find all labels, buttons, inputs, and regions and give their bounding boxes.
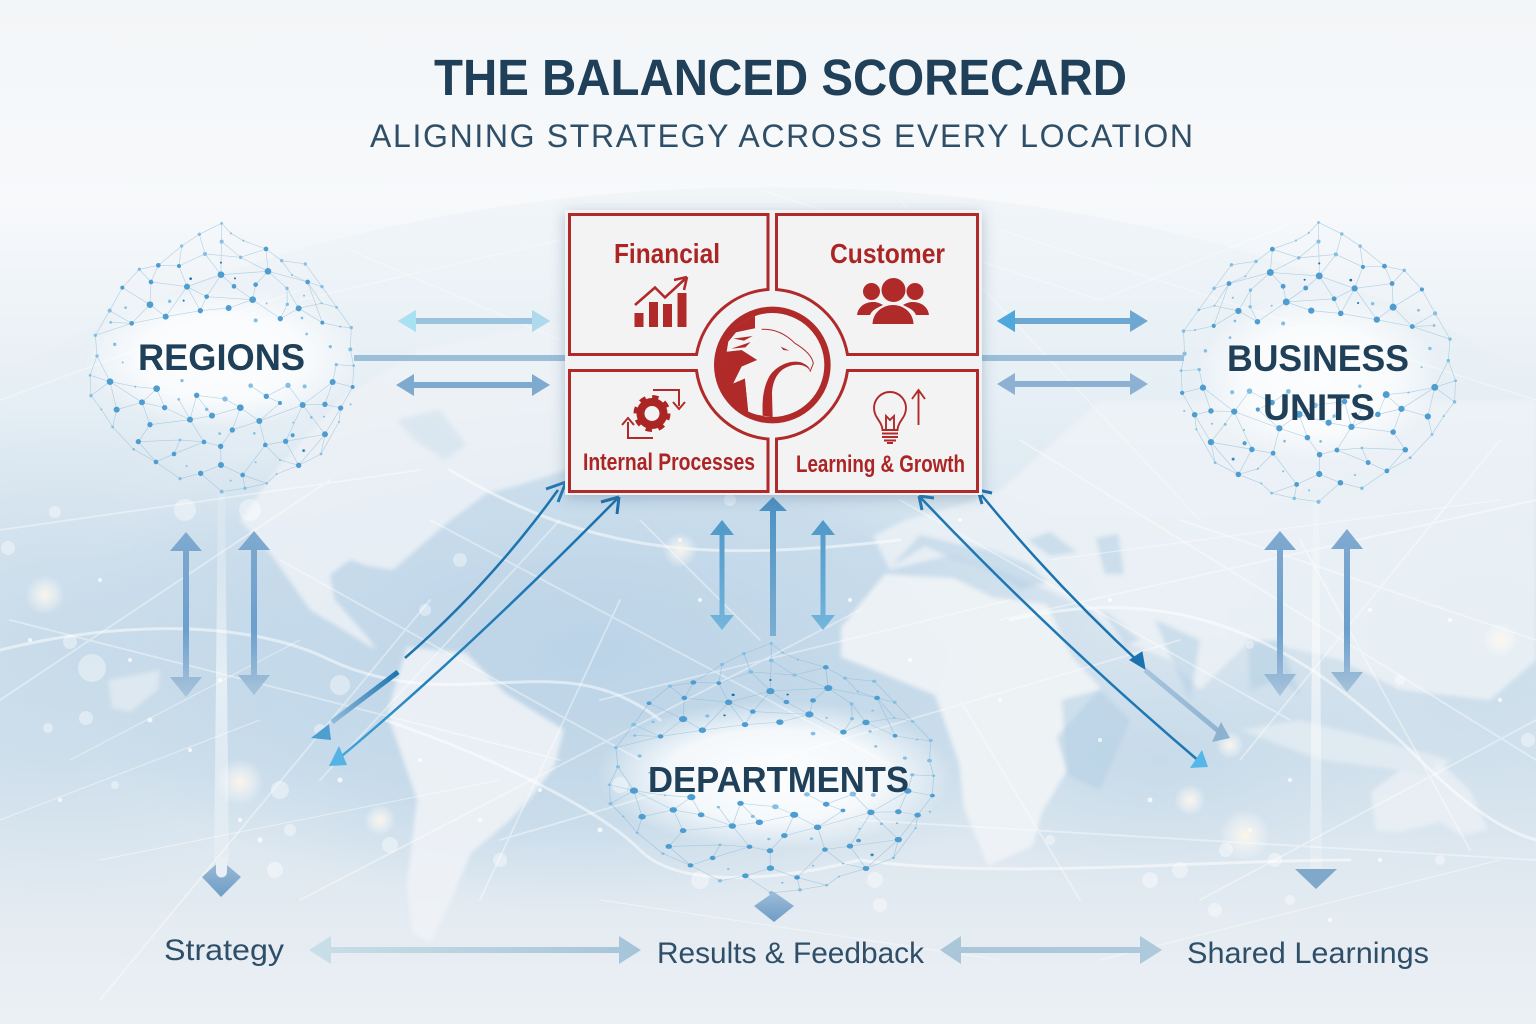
arrow: departments down	[754, 892, 794, 922]
network: departments	[595, 642, 955, 895]
icon: light bulb with up arrow	[874, 390, 925, 443]
logo: eagle in circle	[714, 307, 831, 423]
panel: internal processes: Internal Processes	[583, 449, 755, 476]
arrows: business units vertical	[1264, 529, 1363, 696]
arrows: regions to scorecard	[354, 310, 566, 396]
panel: financial: Financial	[614, 238, 720, 269]
arrow: strategy to results	[309, 936, 641, 964]
panel: financial	[570, 214, 768, 354]
arrows: business units to scorecard	[982, 310, 1184, 395]
label: business units: BUSINESS	[1227, 338, 1409, 379]
network: business units	[1180, 221, 1457, 504]
arrow: results to learnings	[940, 936, 1162, 964]
panel: balanced scorecard card	[565, 210, 982, 495]
background: world map	[0, 320, 1536, 943]
panel: learning and growth	[776, 370, 978, 492]
background: sparkles	[1, 494, 1535, 922]
background: light rays and connection lines	[0, 190, 1536, 1000]
panel: internal processes	[570, 370, 768, 492]
label: regions: REGIONS	[138, 337, 305, 378]
arrows: centre vertical	[710, 497, 835, 636]
network: regions	[82, 222, 362, 494]
curved arrows: right	[919, 490, 1230, 768]
icon: bar chart with rising arrow	[634, 277, 687, 327]
icon: three people	[857, 278, 929, 324]
label: shared learnings: Shared Learnings	[1187, 937, 1429, 970]
arrows: regions vertical	[170, 531, 270, 697]
subtitle: ALIGNING STRATEGY ACROSS EVERY LOCATION	[370, 118, 1193, 154]
curved arrows: left	[311, 482, 619, 766]
background: vertical light beams	[214, 490, 1322, 868]
panel: customer: Customer	[830, 238, 945, 269]
label: strategy: Strategy	[164, 934, 284, 967]
label: results and feedback: Results & Feedback	[657, 937, 925, 970]
icon: gear with cycle arrows	[622, 390, 685, 438]
panel: customer	[776, 214, 978, 354]
arrow: business units down	[1295, 869, 1337, 889]
arrow: regions down	[202, 858, 241, 897]
network: business units: UNITS	[1263, 387, 1375, 428]
panel: learning and growth: Learning & Growth	[796, 451, 965, 478]
label: departments: DEPARTMENTS	[648, 759, 909, 800]
title: THE BALANCED SCORECARD	[434, 49, 1127, 106]
